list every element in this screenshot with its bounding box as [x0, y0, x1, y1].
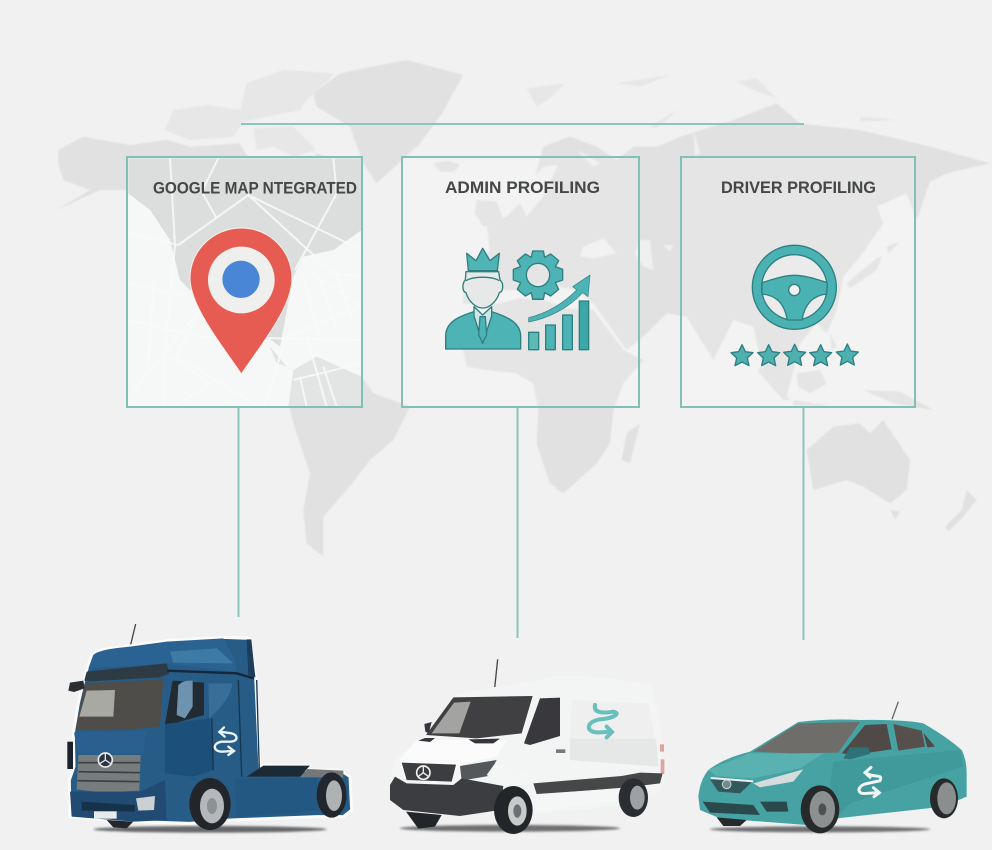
heading: driver profiling: DRIVER PROFILING	[721, 179, 876, 197]
americas and greenland	[57, 60, 463, 557]
wheels	[801, 785, 839, 833]
panel: driver profiling	[681, 157, 915, 407]
vehicle: white van	[389, 659, 664, 834]
vehicle: teal car	[698, 702, 967, 833]
icon: five stars	[731, 344, 858, 366]
grille	[710, 779, 753, 793]
world map	[57, 60, 990, 557]
icon: steering wheel	[757, 250, 832, 325]
connector lines	[238, 124, 804, 640]
cab roof	[88, 638, 237, 672]
logo: route arrows	[589, 705, 617, 737]
bars	[529, 332, 539, 350]
gear	[513, 251, 563, 299]
heading: admin profiling: ADMIN PROFILING	[445, 179, 600, 197]
crown	[467, 248, 499, 271]
panel: admin profiling	[402, 157, 639, 407]
van body	[389, 676, 664, 813]
vehicle: blue truck	[67, 624, 352, 833]
wheels	[494, 786, 533, 834]
rising arrow	[529, 275, 590, 322]
silhouette	[69, 637, 352, 823]
grille and headlight	[402, 763, 456, 782]
head	[463, 272, 503, 308]
lower cab details	[70, 780, 167, 822]
side window and mirror	[165, 681, 204, 724]
logo: route arrows	[215, 727, 236, 755]
windows	[753, 722, 860, 753]
mercedes badge	[98, 753, 112, 767]
handle	[556, 749, 565, 753]
grille	[77, 755, 141, 793]
panel: google map integrated	[127, 157, 362, 407]
headlight	[753, 769, 803, 787]
wheels	[189, 778, 231, 830]
windscreen	[75, 679, 163, 730]
side strip	[533, 773, 663, 794]
icon: map pin	[190, 228, 292, 374]
suit	[446, 312, 521, 349]
windscreen	[426, 696, 533, 738]
heading: google map integrated: GOOGLE MAP NTEGRATED	[153, 180, 357, 198]
seas	[517, 130, 700, 270]
icon: admin with gear and chart	[446, 248, 590, 350]
eurasia, africa, oceania	[463, 75, 990, 532]
hood	[74, 731, 147, 754]
logo: route arrows	[859, 767, 881, 797]
bumper	[390, 777, 503, 816]
car body	[698, 719, 967, 825]
door window	[524, 698, 560, 745]
